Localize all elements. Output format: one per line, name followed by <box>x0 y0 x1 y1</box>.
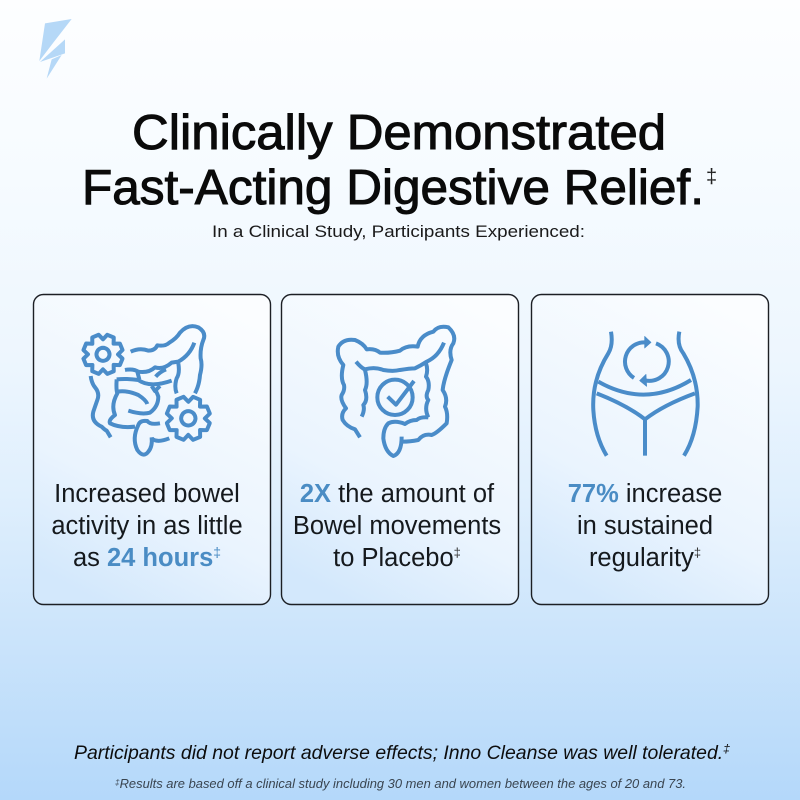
panel: regularity <box>532 294 768 604</box>
text: regularity: ‡ <box>694 545 701 560</box>
text: regularity: in sustained <box>577 512 713 540</box>
title: Clinically Demonstrated <box>132 106 666 160</box>
text: regularity: 77% increase <box>568 480 722 508</box>
title <box>82 106 717 215</box>
icon: waist with cycle arrows <box>593 332 698 456</box>
icon: intestine with gears <box>77 326 217 455</box>
panel: bowel activity <box>34 294 270 604</box>
text: bowel movements: to Placebo <box>333 544 461 572</box>
footnote: ‡ <box>115 778 120 787</box>
text: bowel activity: ‡ <box>213 544 221 560</box>
text: bowel movements: ‡ <box>454 545 461 560</box>
text: bowel activity: activity in as little <box>51 512 243 540</box>
title: Fast-Acting Digestive Relief. <box>82 161 704 215</box>
subtitle: In a Clinical Study, Participants Experienced: <box>212 222 585 241</box>
title: ‡ <box>706 166 717 188</box>
icon: colon with check mark <box>338 327 454 456</box>
safety statement: Participants did not report adverse effects; Inno Cleanse was well tolerated. <box>74 743 709 764</box>
footnote: Results are based off a clinical study including 30 men and women between the ages of 20 and 73. <box>120 777 686 791</box>
logo: lightning bolt <box>39 19 72 79</box>
text: bowel activity: as 24 hours <box>73 544 213 572</box>
text: regularity: regularity <box>589 544 701 572</box>
panel: bowel movements <box>282 294 518 604</box>
text: bowel activity: Increased bowel <box>54 480 240 508</box>
text: bowel movements: Bowel movements <box>293 512 501 540</box>
safety statement: ‡ <box>723 742 730 756</box>
text: bowel movements: 2X the amount of <box>300 480 494 508</box>
